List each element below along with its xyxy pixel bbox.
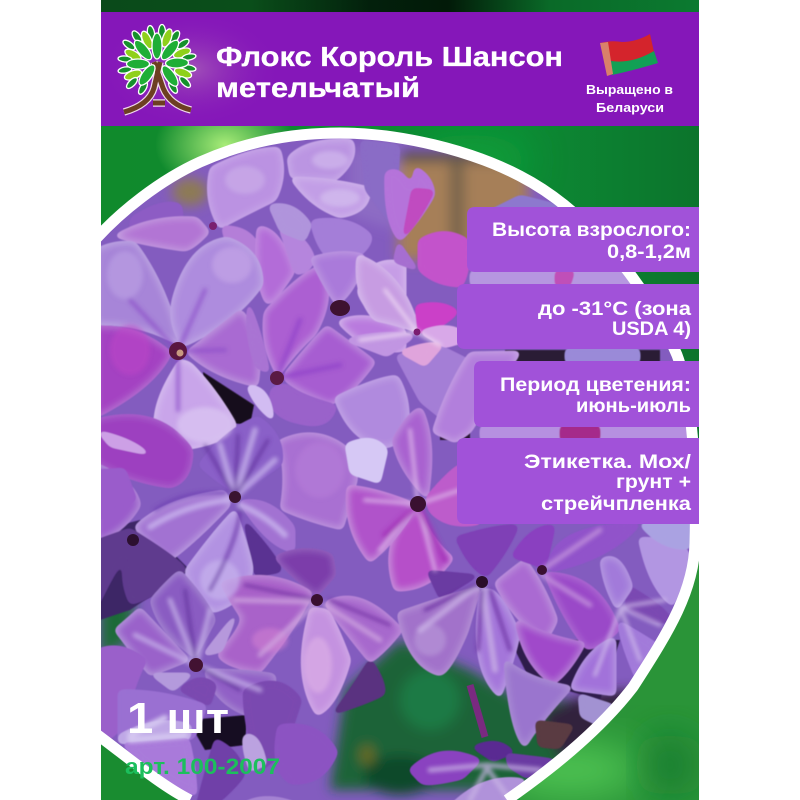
grown in Belarus caption: Выращено в xyxy=(586,82,673,97)
grown in Belarus caption: Беларуси xyxy=(596,100,664,115)
petal highlights and stripes xyxy=(107,151,665,800)
flower: pink centre xyxy=(343,166,690,442)
panel: frost hardiness xyxy=(457,284,699,349)
icon: Belarus flag xyxy=(600,34,658,76)
title: Флокс Король Шансон xyxy=(216,41,563,72)
panel: frost hardiness: USDA 4) xyxy=(612,318,691,340)
panel: flowering period: Период цветения: xyxy=(500,374,691,396)
blurred wood background xyxy=(172,140,528,260)
dark gaps xyxy=(100,350,660,750)
flower: dark left xyxy=(101,528,186,604)
flower: upper left xyxy=(115,148,315,304)
grown in Belarus caption xyxy=(586,85,672,114)
panel: packaging: грунт + xyxy=(616,471,691,493)
panel: packaging: стрейчпленка xyxy=(541,493,691,515)
panel: flowering period xyxy=(474,361,699,427)
panel: packaging xyxy=(457,438,699,524)
flower: top centre xyxy=(268,140,400,267)
stripes xyxy=(130,290,225,410)
header band xyxy=(101,12,699,126)
flower: right lower centre xyxy=(398,525,557,697)
flower photo xyxy=(95,125,705,800)
logo tree xyxy=(118,24,196,112)
title xyxy=(216,46,561,98)
background photo card xyxy=(95,0,705,800)
quantity label: 1 шт xyxy=(127,694,229,743)
flower: bottom centre xyxy=(195,681,338,800)
flower: star left centre xyxy=(96,416,295,612)
flower centres xyxy=(127,222,547,672)
flower: second with centre xyxy=(246,266,375,426)
flower: large bright centre xyxy=(347,408,482,590)
flower: lilac petals under xyxy=(278,376,408,529)
flower: right edge striped xyxy=(535,523,697,749)
flower: right centre deep purple xyxy=(505,523,642,747)
panel: adult height xyxy=(467,207,699,272)
panel: packaging: Этикетка. Мох/ xyxy=(524,451,692,473)
title: метельчатый xyxy=(216,72,420,103)
panel: adult height: Высота взрослого: xyxy=(492,219,691,241)
flower: bottom right xyxy=(408,741,559,800)
flower: centre with dark stamen xyxy=(311,252,405,351)
white arc border xyxy=(95,133,695,800)
flower: left edge xyxy=(96,415,192,542)
flower: bottom left edge xyxy=(96,646,207,797)
flower: middle large xyxy=(218,549,402,715)
panel: flowering period: июнь-июль xyxy=(576,395,691,417)
panel: adult height: 0,8-1,2м xyxy=(607,241,691,263)
flower: lower left xyxy=(115,571,275,715)
article number: арт. 100-2007 xyxy=(125,754,280,779)
stem xyxy=(470,685,485,737)
top green strip xyxy=(101,0,638,12)
flower: large left with dark centre xyxy=(96,238,262,448)
blurred green foliage xyxy=(100,590,640,795)
panel: frost hardiness: до -31°C (зона xyxy=(538,298,691,320)
